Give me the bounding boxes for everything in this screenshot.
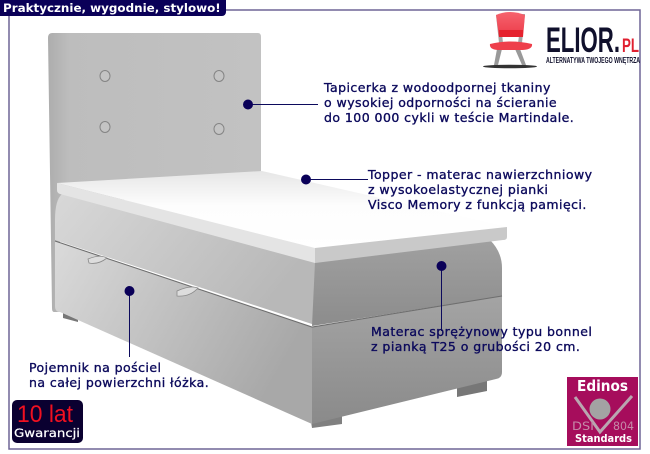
base left face bbox=[55, 241, 312, 424]
warranty badge bbox=[12, 400, 83, 443]
Edinos badge: Edinos bbox=[577, 377, 628, 395]
text: topper: Visco Memory z funkcją pamięci. bbox=[368, 197, 587, 212]
title banner: Praktycznie, wygodnie, stylowo! bbox=[3, 1, 221, 15]
warranty badge: 10 lat bbox=[17, 401, 73, 428]
bed illustration bbox=[48, 33, 507, 428]
headboard bbox=[48, 33, 261, 312]
text: storage bbox=[29, 360, 209, 390]
topper left edge bbox=[57, 183, 315, 263]
text: mattress bbox=[371, 324, 592, 354]
text: storage: Pojemnik na pościel bbox=[29, 360, 161, 375]
mattress right face bbox=[312, 240, 502, 326]
Edinos badge: 804 bbox=[613, 419, 634, 433]
headboard buttons bbox=[100, 70, 224, 134]
text: topper: Topper - materac nawierzchniowy bbox=[368, 167, 592, 182]
Edinos badge: DSI bbox=[572, 419, 594, 433]
callout line: topper bbox=[301, 174, 368, 184]
text: storage: na całej powierzchni łóżka. bbox=[29, 375, 209, 390]
text: mattress: z pianką T25 o grubości 20 cm. bbox=[371, 339, 580, 354]
drawer handles bbox=[88, 256, 198, 296]
callout line: mattress bbox=[436, 261, 446, 331]
text: upholstery: Tapicerka z wodoodpornej tkaniny bbox=[324, 80, 551, 95]
topper right edge bbox=[315, 227, 507, 263]
text: mattress: Materac sprężynowy typu bonnel bbox=[371, 324, 592, 339]
rear foot bbox=[63, 313, 487, 397]
text: topper bbox=[368, 167, 592, 212]
text: upholstery: o wysokiej odporności na ścieranie bbox=[324, 95, 557, 110]
mattress left face bbox=[55, 194, 315, 325]
callout line: upholstery bbox=[243, 100, 318, 110]
base right face bbox=[312, 296, 502, 424]
topper top bbox=[57, 171, 507, 248]
logo chair icon bbox=[483, 12, 537, 68]
text: upholstery: do 100 000 cykli w teście Martindale. bbox=[324, 110, 574, 125]
text: upholstery bbox=[324, 80, 574, 125]
Edinos badge bbox=[567, 377, 638, 446]
logo wordmark: PL bbox=[622, 36, 639, 57]
Edinos badge: Standards bbox=[575, 433, 632, 445]
text: topper: z wysokoelastycznej pianki bbox=[368, 182, 548, 197]
callout line: storage bbox=[124, 286, 134, 357]
warranty badge: Gwarancji bbox=[14, 426, 80, 440]
front foot bbox=[310, 415, 342, 428]
